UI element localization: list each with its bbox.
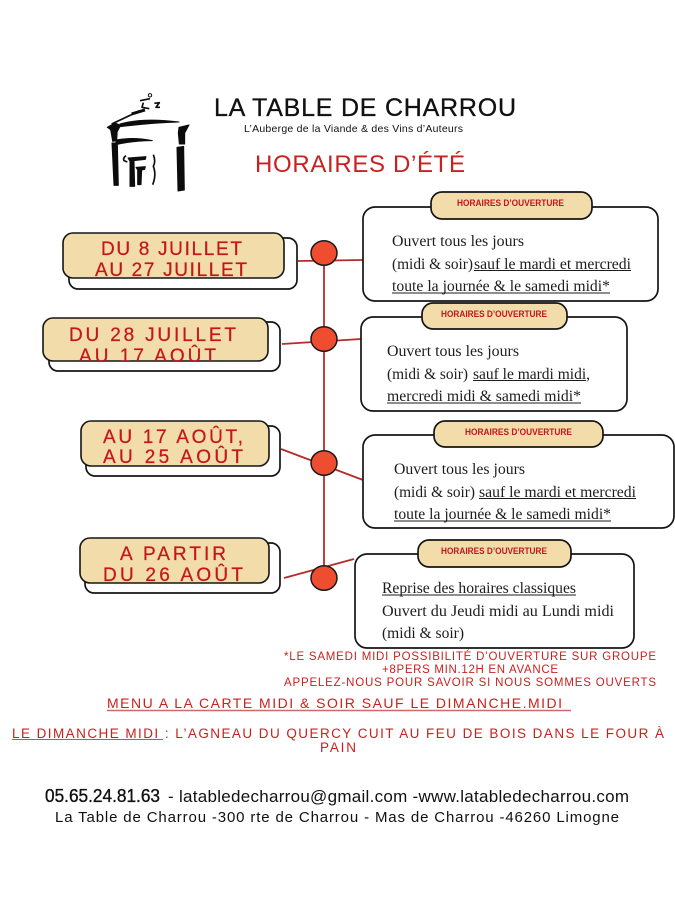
panel: hours 3 [363, 421, 674, 528]
date card 2 [43, 318, 280, 371]
date card 1: AU 27 JUILLET [95, 260, 247, 281]
title: LA TABLE DE CHARROU [214, 94, 516, 122]
panel: hours 1: Ouvert tous les jours [392, 233, 524, 250]
panel: hours 3: (midi & soir) [394, 484, 475, 501]
contact line: - latabledecharrou@gmail.com -www.latabledecharrou.com [168, 787, 629, 806]
panel: hours 3: sauf le mardi et mercredi [479, 484, 637, 501]
timeline dot 2 [311, 327, 337, 351]
panel: hours 4 [355, 540, 634, 648]
panel: hours 4: HORAIRES D’OUVERTURE [441, 546, 547, 556]
footnote: +8PERS MIN.12H EN AVANCE [382, 664, 558, 676]
heading: horaires d'été: HORAIRES D’ÉTÉ [255, 151, 465, 178]
subtitle: L’Auberge de la Viande & des Vins d’Auteurs [244, 123, 463, 135]
panel: hours 2: Ouvert tous les jours [387, 343, 519, 360]
sunday notice [12, 726, 664, 755]
footnote: *LE SAMEDI MIDI POSSIBILITÉ D’OUVERTURE SUR GROUPE [284, 650, 656, 663]
sunday notice: LE DIMANCHE MIDI : L’AGNEAU DU QUERCY CUIT AU FEU DE BOIS DANS LE FOUR À [12, 726, 664, 741]
panel: hours 1: (midi & soir) [392, 256, 473, 273]
date card 2: AU 17 AOÛT [79, 345, 216, 367]
date card 3: AU 17 AOÛT, [103, 426, 243, 448]
date card 1: DU 8 JUILLET [101, 239, 242, 260]
panel: hours 2 [361, 303, 627, 411]
address line: La Table de Charrou -300 rte de Charrou - Mas de Charrou -46260 Limogne [55, 809, 619, 826]
date card 3: AU 25 AOÛT [103, 446, 243, 468]
date card 1 [63, 233, 297, 289]
panel: hours 4: (midi & soir) [382, 625, 464, 642]
date card 4 [80, 538, 280, 593]
panel: hours 3: HORAIRES D’OUVERTURE [465, 427, 572, 437]
panel: hours 3: Ouvert tous les jours [394, 461, 525, 478]
panel: hours 1: HORAIRES D’OUVERTURE [457, 198, 564, 208]
panel: hours 3: toute la journée & le samedi midi* [394, 506, 611, 523]
footnote [284, 650, 656, 689]
panel: hours 2: HORAIRES D’OUVERTURE [441, 309, 547, 319]
sunday notice: PAIN [320, 740, 356, 755]
date card 4: A PARTIR [120, 544, 226, 565]
timeline connectors [281, 253, 363, 578]
menu notice: MENU A LA CARTE MIDI & SOIR SAUF LE DIMANCHE.MIDI [107, 695, 562, 711]
panel: hours 4: Ouvert du Jeudi midi au Lundi midi [382, 603, 615, 620]
panel: hours 2: sauf le mardi midi, [473, 366, 590, 383]
panel: hours 1: toute la journée & le samedi midi* [392, 278, 610, 295]
timeline dot 4 [311, 566, 337, 590]
date card 2: DU 28 JUILLET [69, 325, 236, 346]
icon: restaurant logo [107, 94, 189, 191]
timeline dot 1 [311, 241, 337, 265]
panel: hours 1: sauf le mardi et mercredi [474, 256, 632, 273]
panel: hours 1 [363, 192, 658, 301]
contact line: 05.65.24.81.63 [45, 786, 160, 806]
date card 4: DU 26 AOÛT [103, 564, 243, 586]
panel: hours 2: (midi & soir) [387, 366, 468, 383]
panel: hours 2: mercredi midi & samedi midi* [387, 388, 581, 405]
date card 3 [81, 421, 280, 476]
panel: hours 4: Reprise des horaires classiques [382, 580, 576, 597]
timeline dot 3 [311, 451, 337, 475]
footnote: APPELEZ-NOUS POUR SAVOIR SI NOUS SOMMES OUVERTS [284, 677, 656, 689]
